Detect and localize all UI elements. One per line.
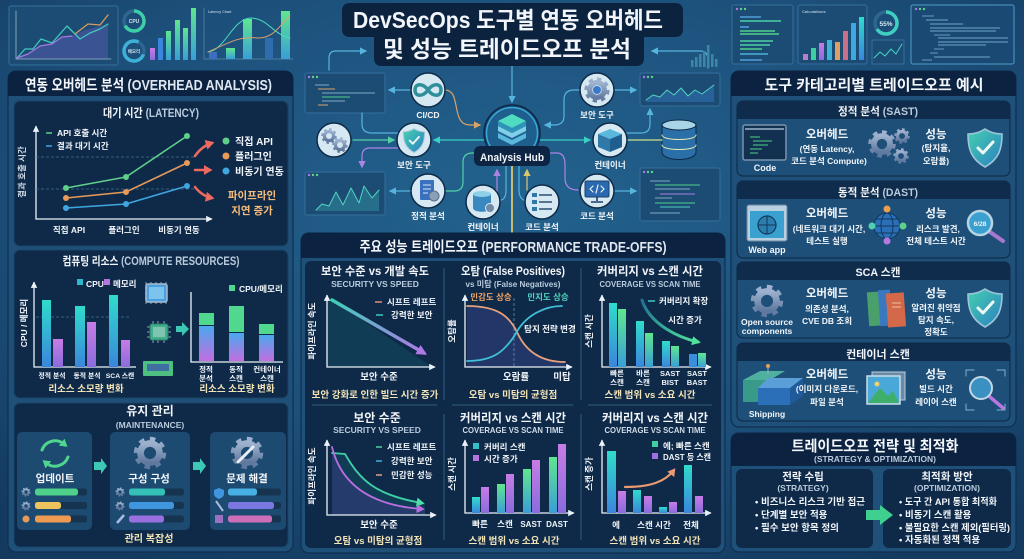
- chart: coverage vs scan time: [584, 265, 711, 401]
- performance text: 리스크 발견,: [916, 224, 960, 234]
- inner panel: [305, 261, 721, 548]
- panel: tool category trade-offs: [731, 71, 1016, 427]
- overhead text: [793, 207, 865, 246]
- chart: coverage vs scan time 2: COVERAGE VS SCAN TIME: [462, 425, 564, 435]
- chart: false positives vs false negatives: 오람률: [503, 371, 529, 383]
- chart window left: [305, 172, 385, 215]
- stacked bar chart: 리소스 소모량 변화: [199, 383, 275, 395]
- chart: security vs speed: 보안 수준: [360, 372, 398, 383]
- chart: coverage vs scan time 3: 전체: [683, 520, 699, 530]
- chart window right: [640, 73, 720, 106]
- icon: globe network: [868, 206, 906, 244]
- performance text: 빌드 시간: [919, 384, 953, 394]
- chart: security level: 보안 수준: [360, 520, 398, 531]
- overhead text: (네트워크 대기 시간,: [793, 224, 865, 234]
- arrows: latency impact: [195, 143, 212, 198]
- title: [342, 3, 683, 66]
- decorative dashboards: top right: [732, 5, 1014, 64]
- node: code monitor: [580, 174, 614, 221]
- sub-panel: maintenance: 관리 복잡성: [125, 533, 173, 545]
- heading: tool category trade-offs: 도구 카테고리별 트레이드오프 예시: [764, 77, 984, 94]
- arrow: chips to stacked chart: [176, 322, 189, 336]
- chart: coverage vs scan time: SAST: [660, 369, 680, 378]
- chart: coverage vs scan time 2: 커버리지 vs 스캔 시간: [460, 411, 566, 425]
- central connector network: [305, 45, 720, 233]
- hub: [474, 105, 550, 166]
- donut: 55%: 55%: [879, 21, 893, 28]
- node: container: 컨테이너: [594, 160, 626, 170]
- stacked bar chart: 동적: [229, 364, 243, 374]
- dividers: [312, 268, 712, 540]
- card: optimization: • 비동기 스캔 활용: [899, 509, 972, 521]
- node: static analysis: 정적 분석: [411, 211, 445, 221]
- overhead text: 오버헤드: [806, 207, 849, 220]
- arrow: strategy to optimization: [866, 505, 893, 525]
- heading: strategy and optimization: 트레이드오프 전략 및 최적화: [792, 438, 959, 455]
- node: settings gears: [317, 123, 351, 157]
- performance text: 오람률): [923, 156, 949, 166]
- overhead text: (연동 Latency,: [800, 144, 854, 154]
- heading: performance trade-offs: [301, 233, 725, 258]
- line chart: latency: 비동기 연동: [158, 225, 200, 235]
- performance text: [911, 287, 961, 337]
- icon: open source gear: Open source: [741, 317, 793, 327]
- chart: coverage vs scan time: 바른: [636, 368, 650, 378]
- performance text: 성능: [925, 287, 947, 300]
- arrow: update to config: [94, 458, 107, 474]
- chart: false positives vs false negatives: 민감도 상승: [470, 292, 512, 302]
- chart: coverage vs scan time 2: [447, 411, 574, 547]
- card: troubleshooting: [210, 432, 286, 530]
- bar chart: cpu and memory: CPU / 메모리: [19, 299, 29, 347]
- chart: security vs speed: [307, 265, 439, 401]
- icon: cpu chip: [145, 282, 167, 304]
- bar chart: cpu and memory: 정적 분석: [39, 371, 65, 380]
- overhead text: 오버헤드: [806, 287, 849, 300]
- heading: performance trade-offs: 주요 성능 트레이드오프 (PERFORMANCE TRADE-OFFS): [360, 239, 667, 256]
- card: update: [17, 432, 92, 530]
- donut: memory: 메모리: [128, 48, 140, 55]
- chart: coverage vs scan time 2: 커버리 스캔: [484, 442, 526, 452]
- card: strategy: 전략 수립: [782, 470, 824, 483]
- chart: coverage vs scan time: 커버리지 확장: [659, 296, 708, 306]
- card: SCA: [737, 262, 1010, 338]
- node: security tool gear: [580, 73, 614, 120]
- icon: shipping containers: Shipping: [749, 409, 785, 419]
- mini bars right of title: [691, 45, 718, 67]
- donut: memory: [121, 38, 147, 64]
- icon: books: [867, 290, 906, 328]
- chart: coverage vs scan time 3: 에: [612, 520, 620, 530]
- chart: coverage vs scan time: BAST: [687, 378, 708, 387]
- icon: open source gear: components: [742, 326, 793, 336]
- card: container scan: [737, 343, 1010, 421]
- chart: coverage vs scan time 2: DAST: [546, 520, 568, 529]
- node: container db: [466, 185, 500, 232]
- chart: coverage vs scan time: BIST: [661, 378, 679, 387]
- card: strategy: (STRATEGY): [777, 483, 829, 493]
- card: update: 업데이트: [36, 472, 75, 485]
- title: 및 성능 트레이드오프 분석: [383, 36, 631, 62]
- chart: coverage vs scan time 3: 스캔 범위 vs 소요 시간: [609, 535, 701, 547]
- performance text: 레이어 스캔: [915, 397, 957, 407]
- legend: integration types: [222, 136, 284, 178]
- chart: security vs speed: 파이프라인 속도: [307, 302, 317, 360]
- bar chart card: [798, 5, 867, 64]
- code list card: [732, 5, 793, 64]
- card: SCA: SCA 스캔: [856, 266, 900, 279]
- icon: shield: [968, 129, 1002, 167]
- node: shield: 보안 도구: [397, 160, 431, 170]
- chart: coverage vs scan time 2: 스캔 범위 vs 소요 시간: [468, 535, 560, 547]
- card: optimization: 최적화 방안: [921, 470, 973, 483]
- chart: false positives vs false negatives: 탐지 전략 변경: [524, 324, 576, 334]
- chart: coverage vs scan time: 시간 증가: [668, 315, 702, 325]
- card: optimization: (OPTIMIZATION): [914, 483, 980, 493]
- icon: shipping containers: [743, 364, 803, 419]
- overhead text: 오버헤드: [806, 368, 849, 381]
- performance text: 성능: [925, 128, 947, 141]
- card: DAST: 동적 분석 (DAST): [838, 186, 918, 199]
- panel: overhead analysis: [8, 71, 293, 552]
- chart: coverage vs scan time: SAST: [687, 369, 707, 378]
- chart: false positives vs false negatives: 오탐 vs 미탐의 균형점: [469, 389, 557, 401]
- chart: coverage vs scan time: 스캔 범위 vs 소요 시간: [604, 389, 696, 401]
- donut: CPU: [124, 11, 144, 31]
- decorative dashboards: top left: [9, 6, 293, 65]
- icon: code window: [743, 125, 786, 173]
- icon: open source gear: [741, 288, 793, 336]
- heading: tool category trade-offs: [731, 71, 1016, 96]
- database icon: [662, 120, 696, 160]
- line chart: latency: 플러그인: [108, 225, 140, 235]
- stacked bar chart: CPU/메모리: [239, 284, 283, 294]
- overhead text: 파일 분석: [810, 397, 844, 407]
- chart: false positives vs false negatives: [447, 265, 576, 401]
- icon: scan magnifier: [966, 370, 1005, 410]
- performance text: 정확도: [924, 327, 948, 337]
- line chart: latency: 직접 API: [53, 225, 85, 235]
- node: static analysis: [411, 174, 445, 221]
- icon: magnifier: [968, 211, 1003, 241]
- icon: image: [867, 372, 905, 404]
- sub-panel: maintenance: 유지 관리: [126, 404, 174, 418]
- performance text: 알려진 취약점: [911, 303, 961, 313]
- stacked bar chart: 분석: [199, 373, 213, 383]
- overhead text: [802, 287, 852, 326]
- card: optimization: [883, 469, 1011, 548]
- chart: false positives vs false negatives: 민지도 상승: [527, 292, 569, 302]
- node: container: [593, 123, 627, 170]
- card: troubleshooting: 문제 해결: [226, 472, 268, 485]
- chart: coverage vs scan time 3: 스캔 시간: [637, 520, 671, 530]
- chart: coverage vs scan time 2: 빠른: [472, 519, 488, 529]
- card: strategy: • 단계별 보안 적용: [755, 509, 828, 521]
- panel: strategy and optimization: [731, 433, 1016, 552]
- overhead text: 오버헤드: [806, 128, 849, 141]
- stacked bar chart: 스캔: [260, 373, 274, 383]
- icon: gears: [870, 130, 908, 162]
- node: code analysis list: 코드 분석: [525, 222, 559, 232]
- heading: overhead analysis: 연동 오버헤드 분석 (OVERHEAD ANALYSIS): [25, 77, 272, 94]
- node: security tool gear: 보안 도구: [580, 110, 614, 120]
- card: strategy: [736, 469, 873, 548]
- icon: code window: Code: [754, 163, 776, 173]
- sub-panel: latency: [14, 101, 288, 246]
- chart: coverage vs scan time: 스캔 시간: [584, 314, 594, 348]
- heading: strategy and optimization: [731, 433, 1016, 466]
- chart: coverage vs scan time: 스캔: [610, 377, 624, 387]
- line chart: latency: 결과 대기 시간: [57, 141, 109, 151]
- chart: coverage vs scan time 3: DAST 등 스캔: [663, 452, 711, 462]
- bar chart: cpu and memory: CPU: [86, 279, 104, 289]
- line chart: latency: [17, 126, 212, 235]
- panel: performance trade-offs: [301, 233, 725, 553]
- bar chart: cpu and memory: SCA 스캔: [106, 371, 134, 380]
- chart: coverage vs scan time 2: 스캔 시간: [447, 457, 457, 491]
- stacked bar chart: 정적: [199, 364, 213, 374]
- card: optimization: • 자동화된 정책 적용: [899, 534, 980, 546]
- title: DevSecOps 도구별 연동 오버헤드: [353, 7, 663, 33]
- card: DAST: [737, 181, 1010, 258]
- card: configuration: [110, 432, 190, 530]
- chart: security level: 강력한 보안: [391, 456, 433, 466]
- code window right: [640, 168, 720, 221]
- chart: coverage vs scan time: 커버리지 vs 스캔 시간: [597, 265, 703, 278]
- icon: memory module: [143, 361, 173, 376]
- overhead text: 테스트 실행: [806, 236, 848, 246]
- overhead text: [791, 128, 867, 166]
- bar chart: cpu and memory: 리소스 소모량 변화: [48, 383, 124, 395]
- sub-panel: compute resources: 컴퓨팅 리소스 (COMPUTE RESOURCES): [62, 255, 240, 268]
- icon: green chip: [147, 321, 171, 343]
- icon: shield: [968, 289, 1002, 327]
- chart: false positives vs false negatives: 오탐률: [447, 319, 457, 343]
- card: SAST: [737, 101, 1010, 176]
- chart: security level: 보안 수준: [353, 411, 401, 425]
- chart: coverage vs scan time 3: 커버리지 vs 스캔 시간: [602, 411, 708, 425]
- sub-panel: maintenance: (MAINTENANCE): [116, 420, 184, 430]
- chart: coverage vs scan time: 스캔: [636, 377, 650, 387]
- sub-panel: compute resources: [14, 250, 288, 398]
- card: SAST: 정적 분석 (SAST): [838, 105, 918, 118]
- hub label: Analysis Hub: [480, 152, 544, 164]
- icon: magnifier: 6/28: [974, 221, 987, 228]
- legend: integration types: 비동기 연동: [235, 165, 284, 178]
- chart: security level: [307, 411, 436, 547]
- card: optimization: • 도구 간 API 통합 최적화: [899, 496, 997, 508]
- code card: [911, 5, 1014, 64]
- overhead text: CVE DB 조회: [802, 316, 852, 326]
- card: optimization: • 불필요한 스캔 제외(필터링): [899, 522, 1010, 534]
- performance text: 성능: [925, 207, 947, 220]
- connectors: [329, 51, 708, 233]
- sub-panel: maintenance: [14, 403, 288, 547]
- combo chart: [204, 8, 293, 59]
- chart: security level: 시프트 레프트: [387, 442, 436, 452]
- windows: [305, 73, 720, 221]
- bar chart: cpu and memory: 메모리: [113, 279, 136, 289]
- stacked bar chart: 스캔: [229, 373, 243, 383]
- performance text: 전체 테스트 시간: [906, 236, 966, 246]
- line chart: latency: 결과 호출 시간: [17, 146, 27, 198]
- chart: security level: SECURITY VS SPEED: [333, 425, 421, 435]
- icon: web window: Web app: [748, 245, 786, 255]
- performance text: [906, 207, 966, 246]
- chart: false positives vs false negatives: 미탑: [553, 371, 571, 383]
- chart: security vs speed: SECURITY VS SPEED: [331, 279, 419, 289]
- chart: false positives vs false negatives: 오탐 (False Positives): [461, 265, 565, 278]
- chart: security vs speed: 보안 강화로 인한 빌드 시간 증가: [312, 389, 439, 401]
- chart: security vs speed: 시프트 레프트: [387, 297, 436, 307]
- bar chart: [150, 8, 196, 60]
- callout: pipeline delay: 파이프라인: [228, 189, 276, 202]
- chart: coverage vs scan time 2: 시간 증가: [484, 454, 518, 464]
- node: CI/CD: CI/CD: [416, 110, 440, 120]
- card: strategy: • 비즈니스 리스크 기반 접근: [755, 496, 865, 508]
- line chart card: [9, 6, 118, 65]
- line chart: latency: API 호출 시간: [57, 128, 107, 138]
- chart: coverage vs scan time 2: 스캔: [497, 519, 513, 529]
- chart: coverage vs scan time 2: SAST: [520, 520, 542, 529]
- callout: pipeline delay: 지연 증가: [231, 204, 273, 217]
- node: code analysis list: [525, 185, 559, 232]
- bar chart: cpu and memory: 동적 분석: [74, 371, 100, 380]
- node: CI/CD: [411, 73, 445, 120]
- performance text: [915, 368, 957, 407]
- overhead text: (이미지 다운로드,: [796, 384, 858, 394]
- performance text: (탐지율,: [922, 143, 950, 153]
- chart: security level: 오탐 vs 미탐의 균형점: [334, 535, 422, 547]
- arrow: config to troubleshooting: [193, 458, 206, 474]
- card: container scan: 컨테이너 스캔: [846, 347, 910, 361]
- overhead text: 의존성 분석,: [805, 304, 849, 314]
- chart: security vs speed: 보안 수준 vs 개발 속도: [321, 265, 429, 278]
- mini line chart: [872, 40, 904, 64]
- overhead text: [796, 368, 858, 407]
- sub-panel: latency: 대기 시간 (LATENCY): [103, 105, 199, 120]
- icon: refresh: [42, 441, 68, 466]
- chart: coverage vs scan time 3: COVERAGE VS SCAN TIME: [604, 425, 706, 435]
- chart: coverage vs scan time 3: 에; 빠른 스캔: [663, 441, 710, 451]
- card: strategy: • 필수 보안 항목 정의: [755, 522, 839, 534]
- donut: CPU: CPU: [129, 19, 140, 25]
- node: container db: 컨테이너: [467, 222, 499, 232]
- code window left: [305, 73, 385, 113]
- chart: security vs speed: 강력한 보안: [391, 310, 433, 320]
- chart: coverage vs scan time 3: [584, 411, 711, 547]
- legend: integration types: 플러그인: [235, 151, 272, 163]
- chart: security level: 민감한 성능: [391, 470, 433, 480]
- chart: coverage vs scan time: 빠른: [610, 368, 624, 378]
- card: configuration: 구성 구성: [128, 472, 170, 485]
- bar chart card: Calculations: [802, 9, 827, 14]
- performance text: [922, 128, 950, 166]
- combo chart: Latency Chart: [208, 10, 232, 14]
- heading: overhead analysis: [8, 71, 293, 96]
- icon: server stack: [498, 114, 526, 145]
- callout: pipeline delay: [228, 189, 276, 217]
- chart: coverage vs scan time 3: 스캔 증가: [584, 457, 594, 491]
- chart: false positives vs false negatives: vs 미탐 (False Negatives): [466, 279, 561, 289]
- chart: security level: 파이프라인 속도: [307, 447, 317, 505]
- overhead text: 코드 분석 Compute): [791, 156, 867, 166]
- node: shield: [397, 123, 431, 170]
- chart: coverage vs scan time: COVERAGE VS SCAN TIME: [600, 279, 701, 289]
- performance text: 탐지 속도,: [918, 315, 954, 325]
- stacked bar chart: 컨테이너: [253, 364, 281, 374]
- node: code monitor: 코드 분석: [580, 211, 614, 221]
- stacked bar chart: [191, 284, 283, 395]
- heading: strategy and optimization: (STRATEGY & OPTIMIZATION): [814, 454, 936, 464]
- icon: web window: [747, 205, 787, 255]
- donut: 55%: [875, 12, 897, 34]
- bar chart: cpu and memory: [19, 279, 136, 395]
- legend: integration types: 직접 API: [235, 136, 273, 148]
- performance text: 성능: [925, 368, 947, 381]
